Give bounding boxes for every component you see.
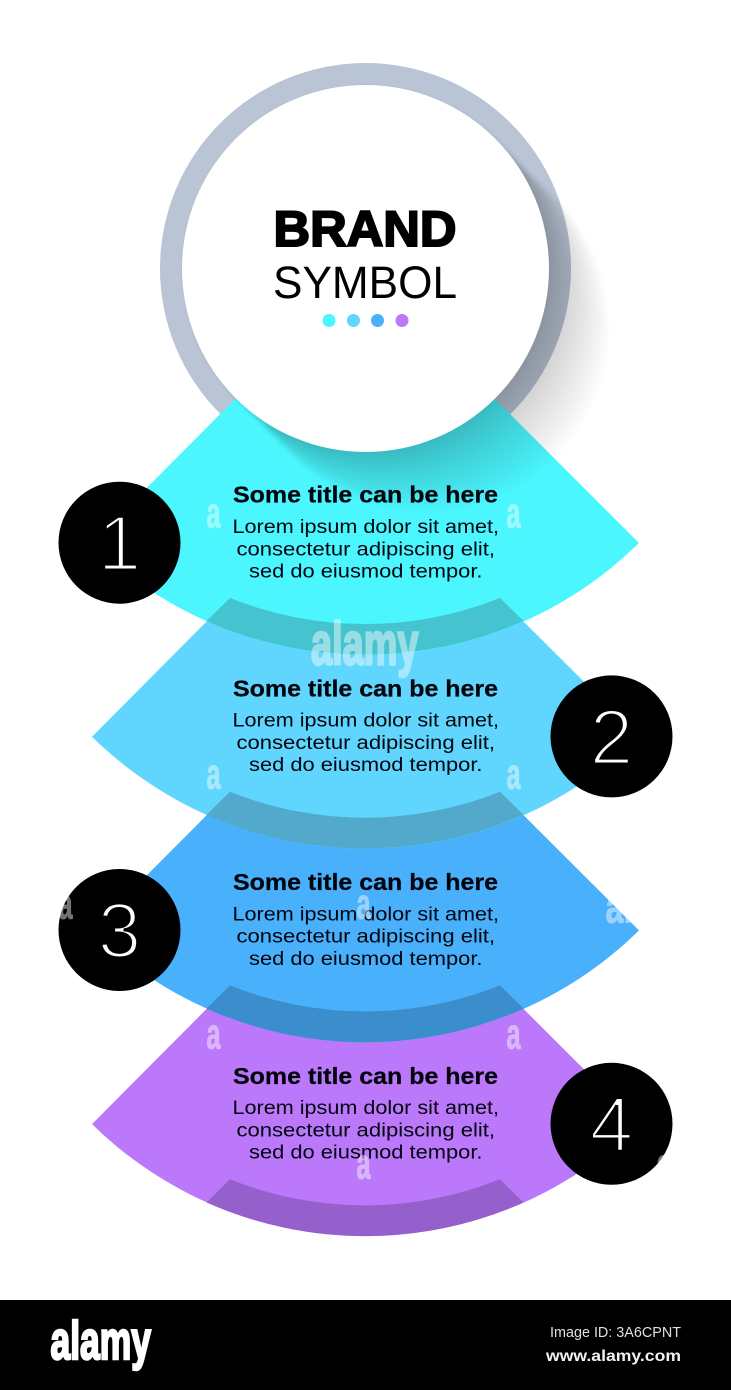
outer ring <box>160 63 571 474</box>
colour dots <box>322 314 408 327</box>
heading: brand symbol: SYMBOL <box>273 257 457 308</box>
central white circle <box>182 85 549 452</box>
watermark text: a <box>656 1140 671 1188</box>
text block: step 3: sed do eiusmod tempor. <box>249 949 482 970</box>
long shadow of central circle <box>182 85 609 512</box>
text block: step 3: Some title can be here <box>233 869 498 895</box>
text block: step 2 <box>232 675 499 776</box>
text block: step 1: Lorem ipsum dolor sit amet, <box>232 517 499 538</box>
text block: step 4 <box>232 1063 499 1164</box>
text block: step 4: Some title can be here <box>233 1063 498 1089</box>
text block: step 4: Lorem ipsum dolor sit amet, <box>232 1098 499 1119</box>
number badge 3: 3 <box>98 886 141 974</box>
number badge 1: 1 <box>98 499 141 587</box>
number badge 3 <box>58 869 180 991</box>
text block: step 2: Some title can be here <box>233 675 498 701</box>
text block: step 1: Some title can be here <box>233 482 498 508</box>
footer logo: alamy <box>50 1311 151 1371</box>
text block: step 2: consectetur adipiscing elit, <box>236 733 495 754</box>
number badge 2: 2 <box>590 693 633 781</box>
text block: step 1: consectetur adipiscing elit, <box>236 539 495 560</box>
text block: step 4: consectetur adipiscing elit, <box>236 1120 495 1141</box>
watermark text: a <box>206 750 221 798</box>
text block: step 4: sed do eiusmod tempor. <box>249 1143 482 1164</box>
watermark text: al <box>606 882 632 932</box>
text block: step 1 <box>232 482 499 582</box>
number badge 4 <box>550 1063 672 1185</box>
watermark text: a <box>506 1010 521 1058</box>
text block: step 3: consectetur adipiscing elit, <box>236 927 495 948</box>
watermark text: a <box>58 880 73 928</box>
watermark text: a <box>206 1010 221 1058</box>
number badge 1 <box>58 482 180 604</box>
text block: step 3: Lorem ipsum dolor sit amet, <box>232 904 499 925</box>
watermark text: alamy <box>311 610 419 678</box>
image id: Image ID: 3A6CPNT <box>550 1324 681 1341</box>
watermark text: a <box>356 880 371 928</box>
panel: step 3 wedge <box>92 792 639 1042</box>
website: www.alamy.com <box>545 1348 681 1365</box>
heading: brand symbol <box>273 201 457 308</box>
number badge 2 <box>550 675 672 797</box>
number badge 4: 4 <box>590 1080 633 1168</box>
footer bar <box>0 1300 731 1390</box>
panel: step 4 wedge <box>92 985 639 1236</box>
watermark text: a <box>356 1140 371 1188</box>
panel: step 2 wedge <box>92 598 639 849</box>
watermark text <box>58 490 671 1188</box>
watermark text: a <box>206 490 221 538</box>
heading: brand symbol: BRAND <box>274 201 456 257</box>
text block: step 2: Lorem ipsum dolor sit amet, <box>232 711 499 732</box>
watermark text: a <box>506 490 521 538</box>
text block: step 2: sed do eiusmod tempor. <box>249 755 482 776</box>
text block: step 3 <box>232 869 499 970</box>
watermark text: a <box>506 750 521 798</box>
text block: step 1: sed do eiusmod tempor. <box>249 562 482 582</box>
panel: step 1 wedge <box>92 394 639 655</box>
